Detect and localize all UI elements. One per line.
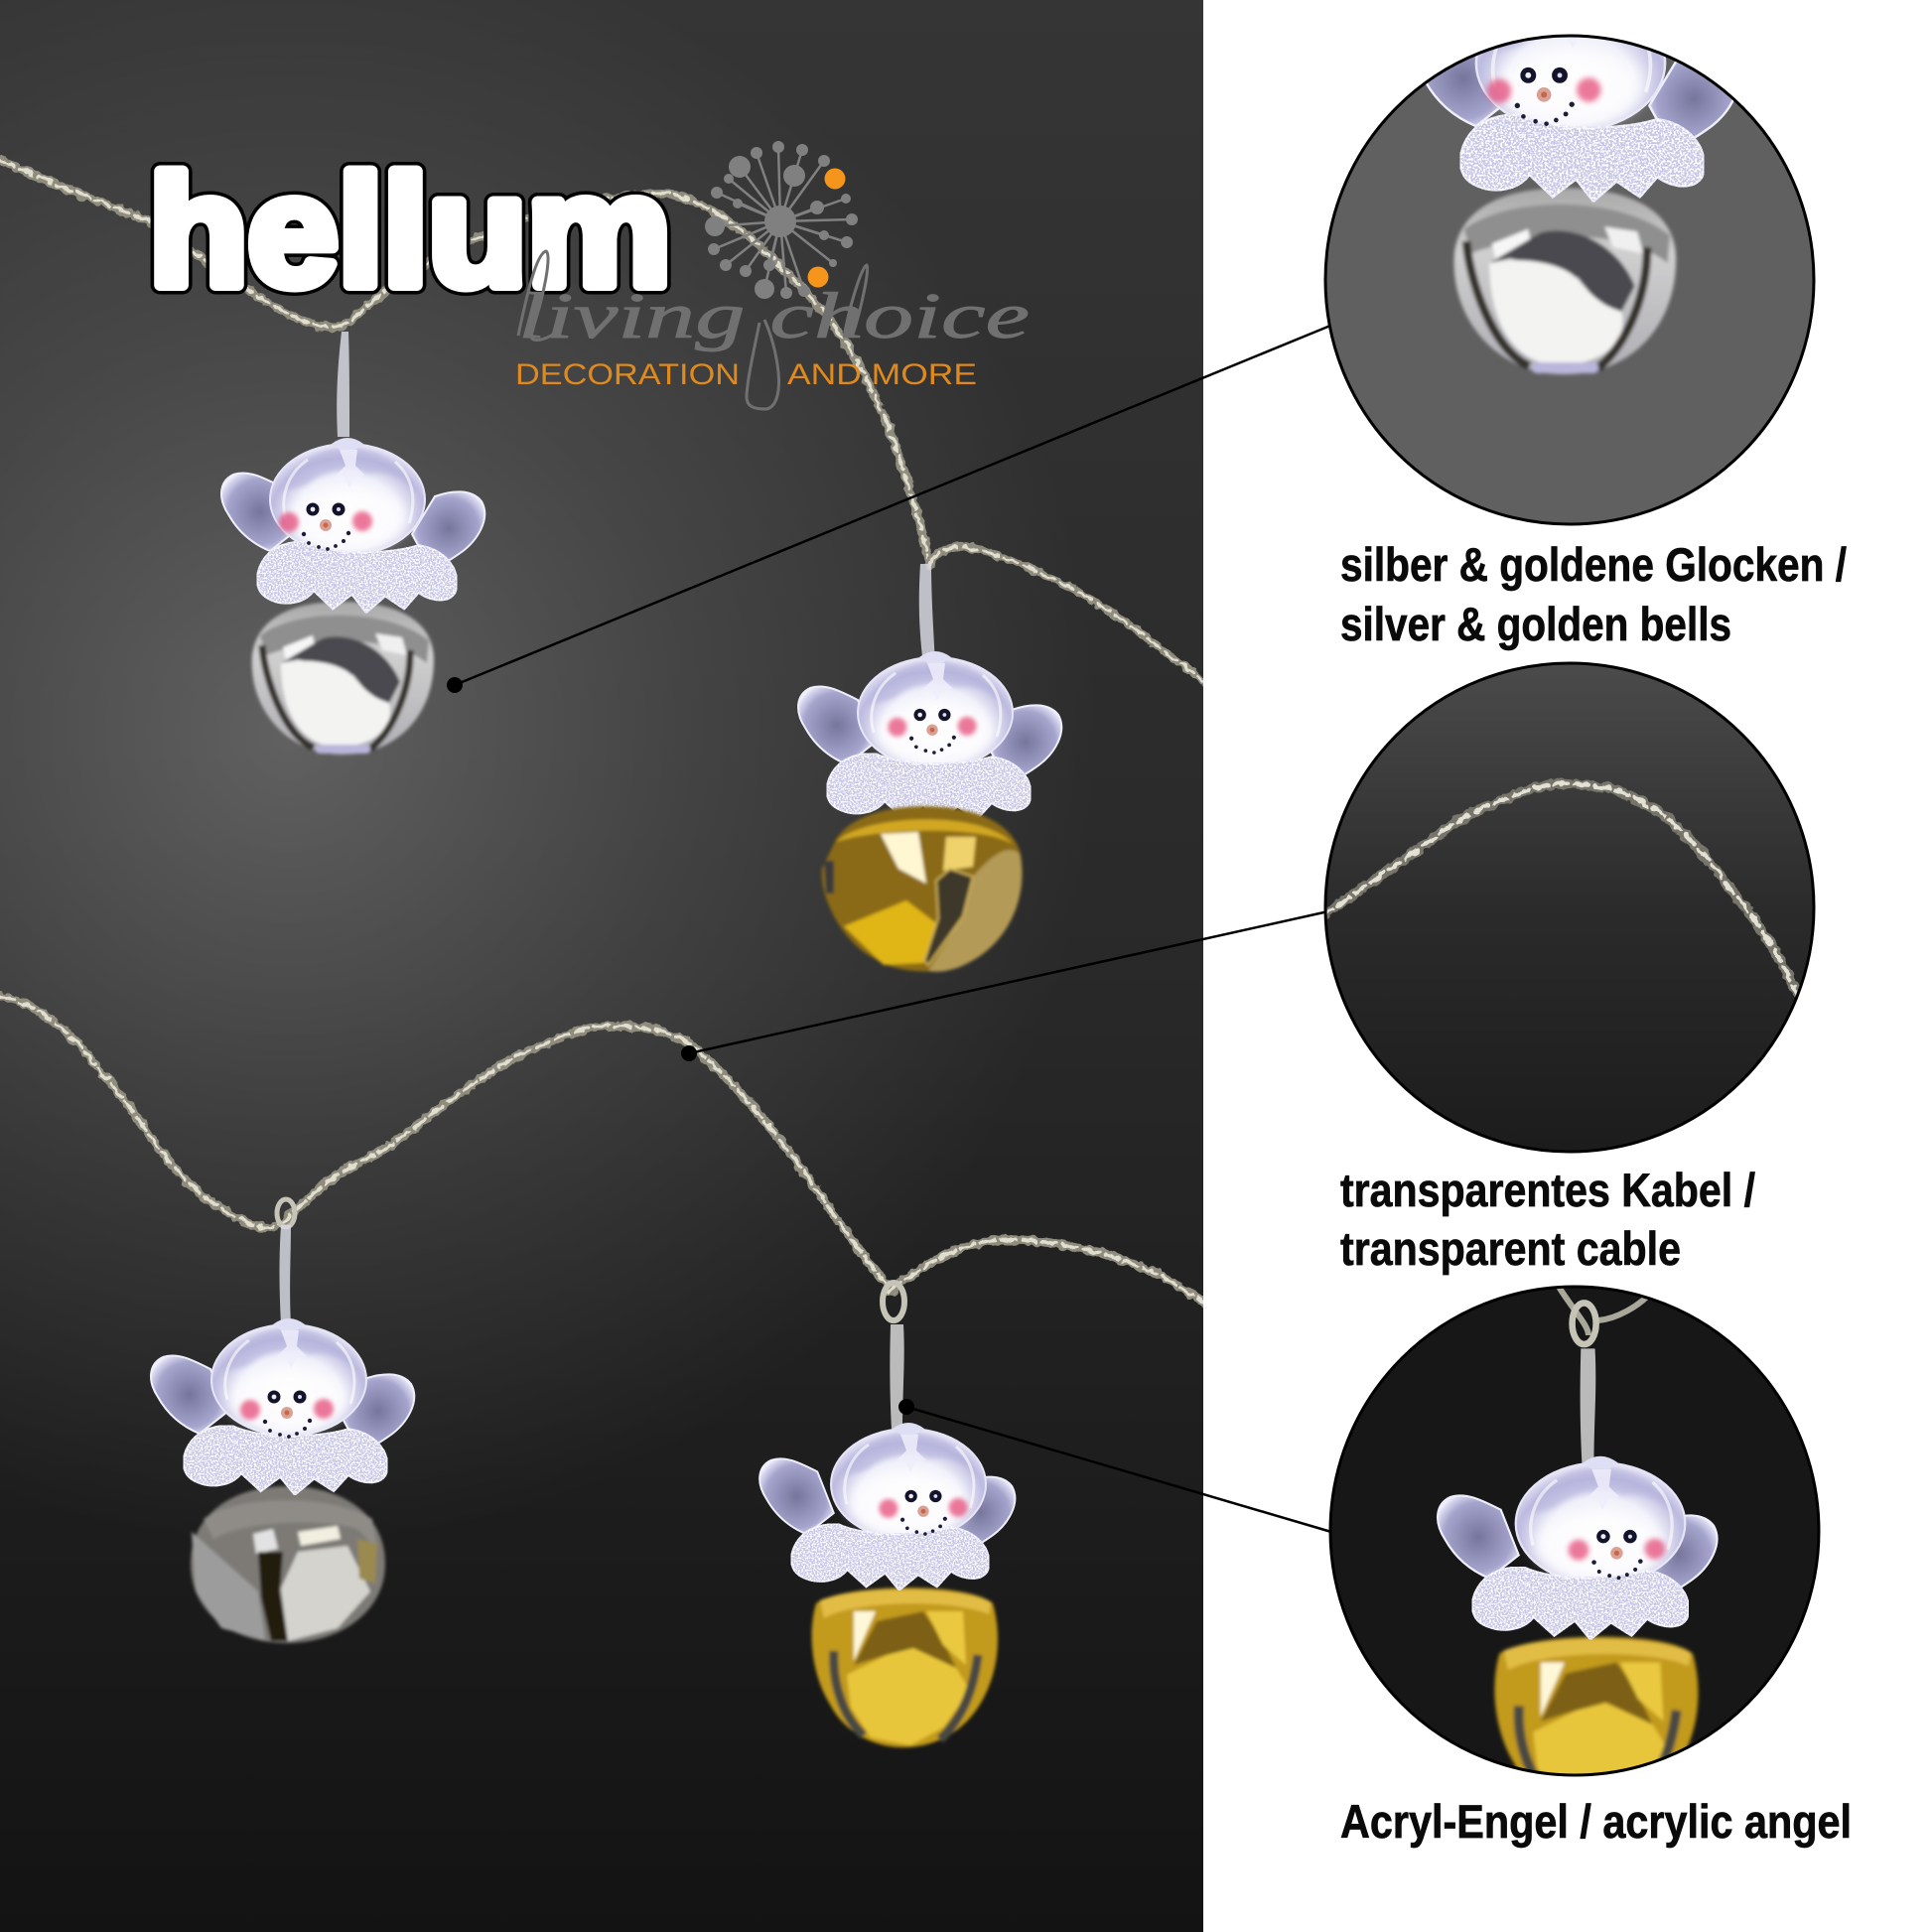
circle: cable detail (1320, 663, 1814, 1152)
angel bell: silver, bottom left (151, 1199, 414, 1643)
logo: decoration and more (515, 358, 977, 391)
logo: decoration and more: DECORATION (515, 358, 740, 391)
caption: cable: transparent cable (1340, 1222, 1681, 1275)
lower transparent cable (0, 996, 1211, 1309)
caption: angel: Acryl-Engel / acrylic angel (1340, 1795, 1852, 1848)
leader line: bells (447, 326, 1330, 693)
logo: decoration and more: AND MORE (787, 358, 977, 391)
logo: living choice script: living choice (518, 280, 1030, 352)
angel bell: gold, bottom right (759, 1283, 1015, 1747)
circle: acrylic angel detail (1330, 1287, 1819, 1811)
leader line: angel (898, 1399, 1331, 1532)
leader line: cable (681, 911, 1328, 1061)
circle: silver bell detail (1325, 0, 1814, 524)
caption: bells (1340, 538, 1847, 650)
upper transparent cable (0, 160, 1211, 687)
logo: hellum: hellum (149, 144, 671, 319)
caption: cable: transparentes Kabel / (1340, 1164, 1755, 1216)
logo: dandelion icon (705, 141, 858, 299)
panel: dark photo background (0, 0, 1203, 1932)
caption: bells: silber & goldene Glocken / (1340, 538, 1847, 591)
logo: living choice script (518, 251, 1030, 409)
angel bell: gold, top right (798, 564, 1061, 972)
angel bell: silver, top left (221, 332, 484, 755)
caption: cable (1340, 1164, 1755, 1275)
logo: hellum: hellum (149, 144, 671, 319)
caption: bells: silver & golden bells (1340, 598, 1731, 650)
logo: orange dots (808, 169, 846, 288)
